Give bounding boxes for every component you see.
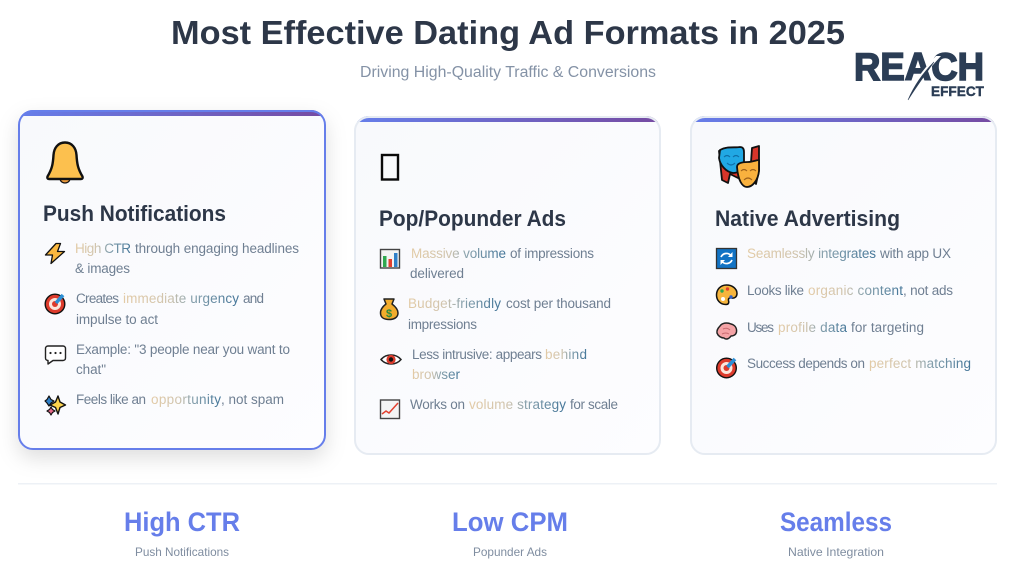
item: high CTR [46, 241, 299, 276]
panel: Pop/Popunder Ads [354, 116, 661, 455]
item: behind browser: browser [412, 367, 460, 382]
item: profile data [717, 320, 924, 339]
stat: High CTR: Push Notifications [135, 545, 229, 559]
panel: Native Advertising [690, 116, 997, 455]
logo: Reach Effect: EFFECT [931, 84, 985, 99]
stat: Low CPM [452, 507, 568, 559]
item: volume strategy: volume strategy [469, 397, 566, 412]
item: volume [380, 246, 594, 281]
item: profile data: Uses [747, 320, 774, 335]
item: opportunity: opportunity [151, 392, 221, 407]
item: urgency: impulse to act [76, 312, 158, 327]
item: profile data: for targeting [851, 320, 924, 335]
stat: Low CPM: Popunder Ads [473, 545, 547, 559]
stat: Low CPM: Low CPM [452, 507, 568, 537]
heading: Native Advertising [715, 206, 900, 231]
stat: Seamless: Native Integration [788, 545, 884, 559]
item: opportunity: Feels like an [76, 392, 146, 407]
item: perfect matching [717, 356, 971, 378]
item: example: chat" [76, 362, 106, 377]
stat: Seamless: Seamless [780, 507, 892, 537]
item: behind browser: behind [545, 347, 587, 362]
item: high CTR: High CTR [75, 241, 131, 256]
item: volume strategy: for scale [570, 397, 618, 412]
item: urgency: immediate urgency [123, 291, 239, 306]
item: opportunity [45, 392, 284, 415]
item: urgency [45, 291, 264, 327]
item: volume strategy [380, 397, 618, 418]
item: budget [380, 296, 611, 332]
title: Most Effective Dating Ad Formats in 2025 [171, 14, 845, 51]
item: profile data: profile data [778, 320, 847, 335]
icon: theatre masks [719, 146, 759, 187]
item: behind browser [381, 347, 587, 382]
icon: missing glyph box [382, 155, 398, 180]
item: high CTR: through engaging headlines [135, 241, 299, 256]
item: integrates: with app UX [879, 246, 951, 261]
item: high CTR: & images [75, 261, 130, 276]
item: organic: organic content [808, 283, 903, 298]
item: budget: $ [386, 308, 392, 320]
item: example: Example: "3 people near you want to [76, 342, 290, 357]
item: organic [716, 283, 953, 304]
item: organic: Looks like [747, 283, 804, 298]
item: budget: cost per thousand [506, 296, 611, 311]
item: integrates [716, 246, 951, 268]
item: budget: impressions [408, 317, 477, 332]
stat: High CTR [124, 507, 240, 559]
item: example [46, 342, 290, 377]
stat: High CTR: High CTR [124, 507, 240, 537]
item: urgency: and [243, 291, 264, 306]
item: opportunity: , not spam [221, 392, 284, 407]
item: perfect matching: Success depends on [747, 356, 865, 371]
item: integrates: Seamlessly integrates [747, 246, 876, 261]
item: volume: delivered [410, 266, 464, 281]
heading: Pop/Popunder Ads [379, 206, 566, 231]
heading: Push Notifications [43, 201, 226, 226]
item: urgency: Creates [76, 291, 119, 306]
stat: Seamless [780, 507, 892, 559]
item: perfect matching: perfect matching [869, 356, 971, 371]
item: behind browser: Less intrusive: appears [412, 347, 542, 362]
item: budget: Budget-friendly [408, 296, 501, 311]
item: volume: Massive volume [411, 246, 506, 261]
icon: bell [47, 142, 83, 183]
logo: Reach Effect: REACH [854, 46, 984, 89]
subtitle: Driving High-Quality Traffic & Conversions [360, 64, 656, 81]
item: organic: , not ads [903, 283, 953, 298]
item: volume strategy: Works on [410, 397, 465, 412]
item: volume: of impressions [510, 246, 594, 261]
panel: Push Notifications [18, 110, 326, 450]
